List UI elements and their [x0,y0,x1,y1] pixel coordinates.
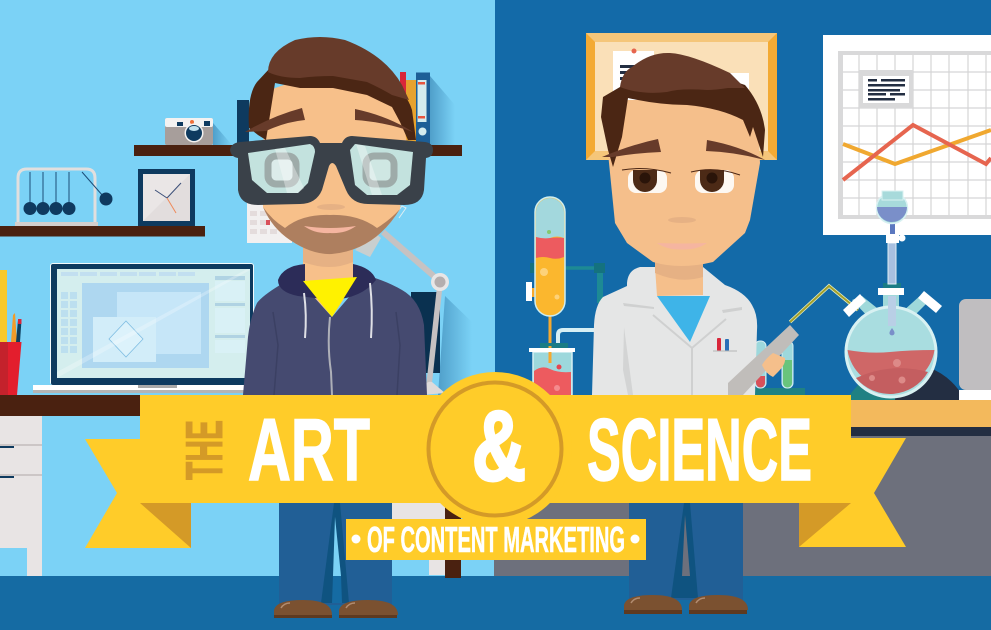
panel: science scene [526,33,991,400]
icon: newton's cradle [15,169,112,226]
corkboard [586,33,777,160]
artist hair [249,37,416,140]
artist beard [263,207,400,254]
round flask apparatus [790,191,942,397]
chart series: orange line [843,130,991,164]
artist neck [303,245,353,317]
artist hoodie [243,264,427,395]
ribbon right fold [799,503,851,547]
background: science wall [495,0,991,576]
artist trousers [279,500,392,605]
scientist hand [762,353,785,377]
artist shoes [274,600,398,618]
flask base [845,385,895,400]
tall test tube [526,197,565,344]
panel: art scene [0,72,472,578]
desk [0,395,461,578]
icon: wall clock [138,169,195,226]
scientist mouth [657,243,707,250]
subtitle plate [346,519,646,560]
scientist eyebrows [602,139,765,160]
lower shelf [0,226,205,236]
dark blob behind flask [880,362,965,400]
chart series: red line [843,125,991,180]
lab coat [592,260,757,395]
subtitle plate: OF CONTENT MARKETING [367,519,625,560]
heading word: THE: THE [176,420,234,480]
scientist trousers [629,500,743,600]
artist face [262,78,408,254]
small test tubes [745,341,805,396]
heading word: ART: ART [248,400,370,499]
icon: pencil cup [0,270,22,395]
heading word: SCIENCE: SCIENCE [587,400,812,499]
ribbon left fold [140,503,191,548]
ribbon main band [140,395,851,503]
artist eyebrows [245,108,413,132]
monitor [959,299,991,400]
neck shadow [303,245,353,267]
character: artist [230,37,433,618]
beaker [529,343,575,395]
scientist face [608,100,760,266]
floor [0,576,991,630]
science desk cabinet [494,400,991,576]
scientist hair [601,53,765,167]
clipboard [728,325,799,395]
artist nose [317,204,345,210]
heading ampersand: & [472,390,526,501]
character: scientist [592,53,799,614]
icon: desk lamp [355,206,472,395]
icon: camera [165,118,232,145]
icon: calendar [247,203,292,243]
scientist shoes [624,595,748,614]
lab stand pipes [530,263,605,345]
ribbon right tail [799,438,906,547]
artist mouth [304,226,356,233]
title banner [85,372,906,560]
upper shelf [134,145,462,156]
line chart poster [823,35,991,235]
scientist eyes [622,169,740,193]
background: art wall [0,0,495,576]
icon: binders and books [237,72,455,146]
laptop [33,263,254,393]
scientist nose [668,217,696,223]
ribbon left tail [85,439,191,548]
ampersand medallion [418,372,572,526]
artist glasses [230,136,433,205]
